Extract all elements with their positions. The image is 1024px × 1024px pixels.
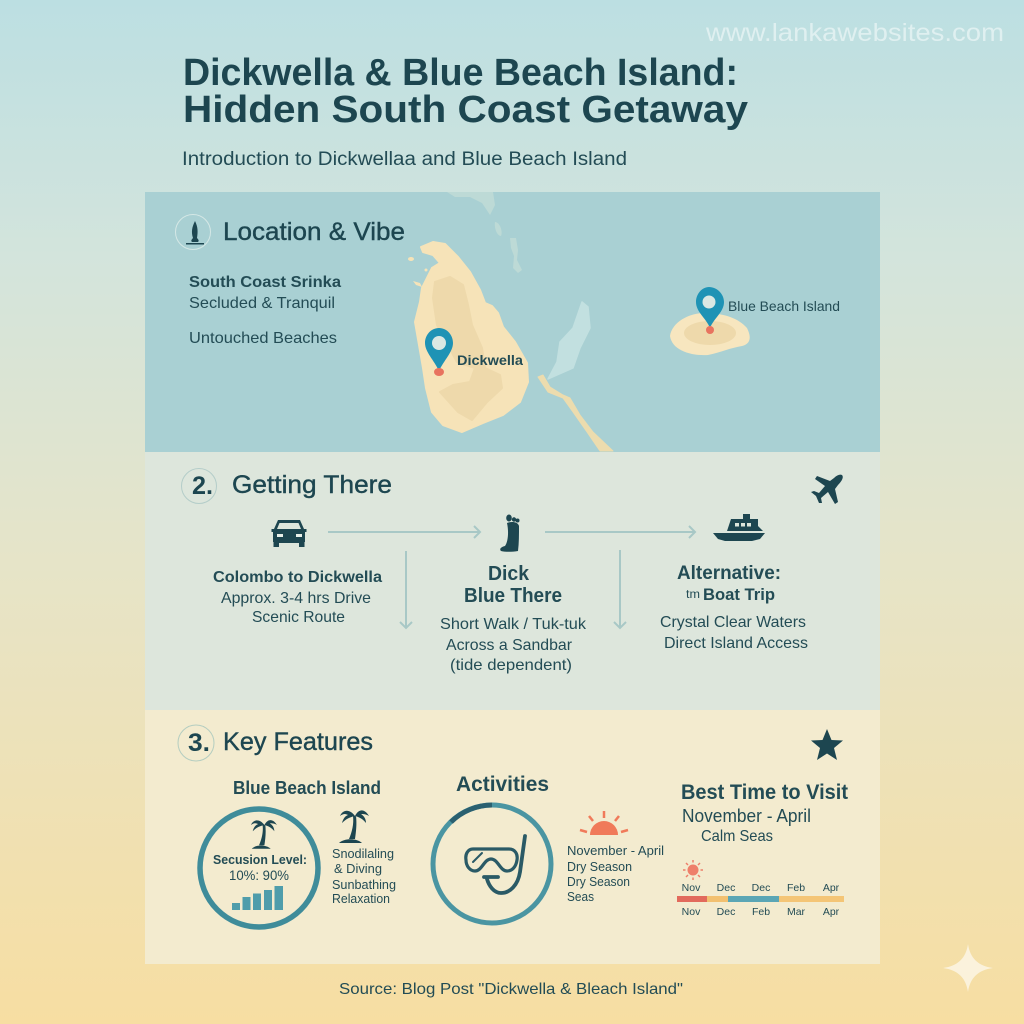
text: Colombo to Dickwella bbox=[213, 569, 382, 626]
timeline: Feb bbox=[787, 882, 805, 894]
text: Blue There: Blue There bbox=[464, 585, 562, 607]
icon: sparkle bbox=[943, 944, 993, 992]
text: best time to visit: Calm Seas bbox=[701, 828, 773, 845]
watermark: www.lankawebsites.com bbox=[705, 19, 1004, 47]
text: location details: South Coast Srinka bbox=[189, 274, 341, 291]
text: Colombo to Dickwella: Scenic Route bbox=[252, 609, 345, 626]
seclusion gauge: 10%: 90% bbox=[229, 867, 289, 883]
text: Blue There bbox=[440, 563, 587, 674]
icon: palm bbox=[339, 810, 369, 843]
badge: 3: 3. bbox=[188, 729, 210, 757]
timeline: Dec bbox=[717, 882, 735, 894]
text: season list: November - April bbox=[567, 844, 664, 858]
map label: Blue Beach Island: Blue Beach Island bbox=[728, 298, 840, 314]
timeline bbox=[677, 882, 844, 918]
badge: 2: 2. bbox=[192, 472, 213, 500]
arrow: car to foot bbox=[328, 526, 480, 538]
text: activities list: Sunbathing bbox=[332, 877, 396, 892]
timeline: Apr bbox=[823, 906, 840, 918]
map: eastern reef bbox=[548, 302, 590, 379]
panel: location and vibe bbox=[145, 192, 880, 452]
text: best time to visit bbox=[681, 781, 848, 845]
arrow: down right bbox=[614, 550, 626, 628]
subtitle: Introduction to Dickwellaa and Blue Beach Island bbox=[182, 149, 627, 170]
text: season list: Dry Season bbox=[567, 875, 630, 889]
heading: key features: Key Features bbox=[223, 728, 373, 756]
timeline: Mar bbox=[787, 906, 806, 918]
timeline: Feb bbox=[752, 906, 770, 918]
icon: plane bbox=[811, 475, 843, 504]
arrow: down left bbox=[400, 551, 412, 628]
text: best time to visit: Best Time to Visit bbox=[681, 781, 848, 804]
text: season list: Seas bbox=[567, 890, 594, 904]
text: activities list: & Diving bbox=[334, 861, 382, 876]
title bbox=[183, 52, 748, 131]
text: Blue There: Short Walk / Tuk-tuk bbox=[440, 616, 587, 633]
text: alternative boat trip: Crystal Clear Waters bbox=[660, 614, 806, 631]
badge: 2 bbox=[182, 468, 216, 504]
icon: sun bbox=[580, 811, 628, 835]
text: alternative boat trip: Boat Trip bbox=[703, 585, 775, 604]
map: sand spit bbox=[538, 375, 613, 451]
text: alternative boat trip: tm bbox=[686, 587, 700, 601]
arrow: foot to boat bbox=[545, 526, 695, 538]
map: northern island chain bbox=[447, 192, 522, 273]
title: Hidden South Coast Getaway bbox=[183, 89, 748, 131]
heading: activities: Activities bbox=[456, 773, 549, 796]
timeline: Nov bbox=[682, 882, 701, 894]
icon: boat bbox=[713, 514, 765, 541]
heading: getting there: Getting There bbox=[232, 471, 392, 499]
icon: sail bbox=[176, 214, 210, 250]
panel: getting there bbox=[145, 452, 880, 710]
heading: location and vibe: Location & Vibe bbox=[223, 218, 405, 246]
map: Blue Beach Island bbox=[670, 313, 750, 355]
timeline: Dec bbox=[752, 882, 770, 894]
source line: Source: Blog Post "Dickwella & Bleach Island" bbox=[339, 981, 683, 998]
text: location details: Untouched Beaches bbox=[189, 330, 337, 347]
map: Sri Lanka bbox=[408, 242, 528, 432]
heading: Blue Beach Island: Blue Beach Island bbox=[233, 778, 381, 798]
timeline: Apr bbox=[823, 882, 840, 894]
activities ring bbox=[433, 805, 551, 923]
text: Colombo to Dickwella: Approx. 3-4 hrs Drive bbox=[221, 590, 371, 607]
icon: car bbox=[272, 520, 306, 547]
seclusion gauge bbox=[200, 809, 318, 927]
icon: star bbox=[811, 729, 843, 760]
text: activities list: Snodilaling bbox=[332, 846, 394, 861]
text: alternative boat trip bbox=[660, 563, 808, 652]
text: Blue There: Dick bbox=[488, 563, 530, 585]
text: activities list bbox=[332, 846, 396, 906]
timeline: Dec bbox=[717, 906, 735, 918]
panel: key features bbox=[145, 710, 880, 964]
map label: Dickwella: Dickwella bbox=[457, 352, 523, 368]
icon: snorkel mask bbox=[466, 836, 525, 893]
text: season list: Dry Season bbox=[567, 860, 632, 874]
text: alternative boat trip: Alternative: bbox=[677, 563, 781, 584]
text: Colombo to Dickwella: Colombo to Dickwella bbox=[213, 569, 382, 586]
text: Blue There: Across a Sandbar bbox=[446, 637, 573, 654]
text: Blue There: (tide dependent) bbox=[450, 657, 572, 674]
icon: footprint bbox=[500, 514, 520, 552]
text: location details: Secluded & Tranquil bbox=[189, 295, 335, 312]
bar chart bbox=[232, 886, 283, 910]
text: activities list: Relaxation bbox=[332, 891, 390, 906]
pin: Blue Beach Island bbox=[696, 287, 724, 334]
text: season list bbox=[567, 844, 664, 904]
title: Dickwella & Blue Beach Island: bbox=[183, 52, 738, 94]
pin: Dickwella bbox=[425, 328, 453, 376]
seclusion gauge: Secusion Level: bbox=[213, 852, 307, 867]
icon: palm in gauge bbox=[251, 820, 277, 849]
icon: small sun bbox=[683, 860, 703, 880]
text: alternative boat trip: Direct Island Access bbox=[664, 635, 808, 652]
text: best time to visit: November - April bbox=[682, 806, 811, 826]
text: location details bbox=[189, 274, 341, 347]
timeline: Nov bbox=[682, 906, 701, 918]
badge: 3 bbox=[178, 725, 214, 761]
